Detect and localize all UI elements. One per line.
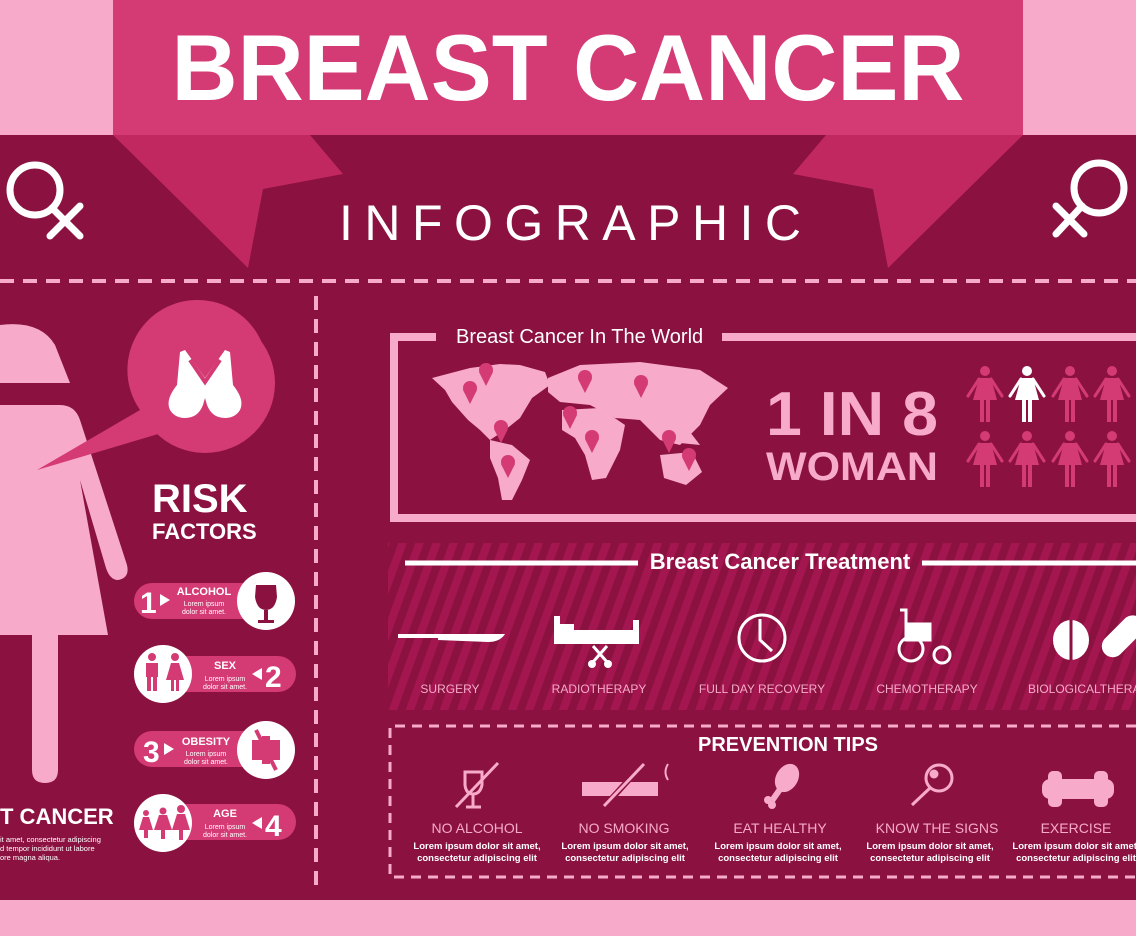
prevention labels: NO ALCOHOL — [431, 820, 523, 836]
panel: prevention tips: consectetur adipiscing elit — [870, 853, 991, 864]
panel: prevention tips: consectetur adipiscing elit — [1016, 853, 1136, 864]
panel: treatment — [388, 543, 1136, 710]
risk 3 obesity — [134, 721, 295, 779]
breast cancer caption: T CANCER — [0, 804, 114, 829]
icon: no smoking — [582, 763, 668, 807]
panel: prevention tips: Lorem ipsum dolor sit amet, — [714, 841, 842, 852]
title banner: BREAST CANCER — [172, 15, 964, 120]
stat: 1 in 8 woman: 1 IN 8 — [766, 380, 938, 449]
risk 2 sex: SEX — [214, 660, 237, 672]
risk 1 alcohol: dolor sit amet. — [182, 609, 226, 616]
ribbon folds — [113, 135, 1023, 268]
panel: prevention tips — [390, 726, 1136, 877]
risk 1 alcohol: ALCOHOL — [177, 586, 231, 598]
stat: 1 in 8 woman — [766, 380, 938, 489]
breast cancer caption: ore magna aliqua. — [0, 853, 60, 862]
breast cancer caption: d tempor incididunt ut labore — [0, 844, 95, 853]
icon: pills — [1053, 611, 1136, 662]
stat: 1 in 8 woman: WOMAN — [766, 445, 938, 489]
risk 2 sex — [134, 645, 296, 703]
panel: prevention tips: consectetur adipiscing elit — [565, 853, 686, 864]
prevention heading: PREVENTION TIPS — [698, 734, 878, 756]
risk 2 sex: dolor sit amet. — [203, 684, 247, 691]
risk 1 alcohol — [134, 572, 295, 630]
risk 3 obesity: Lorem ipsum — [186, 751, 226, 758]
risk factors heading — [152, 477, 257, 544]
treatment labels: RADIOTHERAPY — [552, 682, 646, 696]
treatment labels: FULL DAY RECOVERY — [699, 682, 825, 696]
risk 3 obesity: OBESITY — [182, 736, 231, 748]
icon: magnifier — [912, 765, 952, 805]
risk 3 obesity: 3 — [143, 736, 160, 769]
risk 4 age — [134, 794, 296, 852]
subtitle: INFOGRAPHIC — [339, 195, 801, 251]
icon: dumbbell — [1042, 771, 1114, 807]
breast cancer caption — [0, 804, 114, 862]
treatment labels: CHEMOTHERAPY — [876, 682, 978, 696]
treatment labels — [420, 682, 1136, 696]
icon: chicken leg — [764, 760, 804, 809]
icon: bed — [554, 616, 639, 668]
risk factors heading: RISK — [152, 477, 248, 521]
woman figure — [0, 324, 128, 783]
icon: clock — [739, 615, 785, 661]
prevention labels: EXERCISE — [1041, 820, 1111, 836]
risk 4 age: Lorem ipsum — [205, 824, 245, 831]
risk 4 age: dolor sit amet. — [203, 832, 247, 839]
world map — [432, 362, 728, 500]
risk 3 obesity: dolor sit amet. — [184, 759, 228, 766]
treatment labels: SURGERY — [420, 682, 480, 696]
panel: world — [394, 326, 1136, 518]
icon: female symbol right — [1056, 163, 1124, 234]
risk 2 sex: 2 — [265, 661, 282, 694]
risk 1 alcohol: 1 — [140, 587, 157, 620]
title banner — [113, 0, 1023, 135]
speech bubble with bra icon — [37, 300, 275, 470]
icon: wheelchair — [899, 610, 950, 663]
panel: prevention tips: Lorem ipsum dolor sit amet, — [866, 841, 994, 852]
panel: prevention tips: consectetur adipiscing elit — [417, 853, 538, 864]
prevention labels: NO SMOKING — [578, 820, 670, 836]
icon: female symbol left — [10, 165, 80, 236]
panel: prevention tips: consectetur adipiscing elit — [718, 853, 839, 864]
world heading: Breast Cancer In The World — [456, 326, 703, 348]
map pins — [463, 363, 696, 478]
panel: prevention tips: Lorem ipsum dolor sit amet, — [1012, 841, 1136, 852]
icon: no alcohol — [456, 763, 498, 807]
panel: prevention tips: Lorem ipsum dolor sit amet, — [413, 841, 541, 852]
prevention labels: EAT HEALTHY — [733, 820, 827, 836]
icon: scalpel — [398, 634, 505, 642]
women pictogram — [968, 366, 1129, 487]
risk 4 age: 4 — [265, 810, 282, 843]
risk 4 age: AGE — [213, 808, 237, 820]
treatment heading: Breast Cancer Treatment — [650, 549, 911, 574]
breast cancer caption: it amet, consectetur adipiscing — [0, 835, 101, 844]
risk 1 alcohol: Lorem ipsum — [184, 601, 224, 608]
prevention labels: KNOW THE SIGNS — [876, 820, 998, 836]
prevention labels — [431, 820, 1111, 836]
risk factors heading: FACTORS — [152, 519, 257, 544]
panel: prevention tips: Lorem ipsum dolor sit amet, — [561, 841, 689, 852]
risk 2 sex: Lorem ipsum — [205, 676, 245, 683]
